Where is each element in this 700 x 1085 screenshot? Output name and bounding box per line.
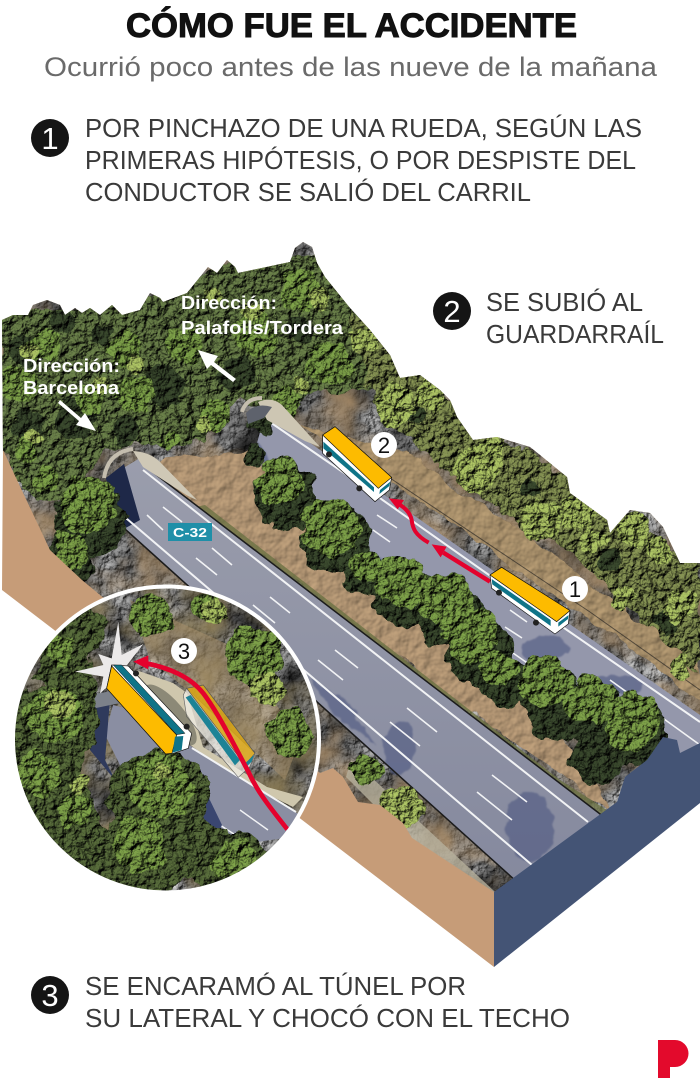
badge 3 on inset: 3 <box>178 639 190 664</box>
bus 1 <box>490 567 570 634</box>
badge 1 on map: 1 <box>569 577 581 602</box>
step 1 text: POR PINCHAZO DE UNA RUEDA, SEGÚN LAS <box>85 113 642 143</box>
step 2 badge: 2 <box>443 294 461 329</box>
second road <box>257 424 700 753</box>
arrow: towards Barcelona <box>58 400 96 431</box>
terrain photo surface <box>0 240 700 917</box>
crashed bus <box>107 665 192 754</box>
tunnel entrances <box>104 398 320 500</box>
barriers <box>115 470 700 882</box>
road markings <box>120 420 700 865</box>
step 1 badge: 1 <box>41 121 59 156</box>
badge 2 on map <box>371 432 397 458</box>
road sign C-32: C-32 <box>173 525 207 540</box>
arrow: towards Palafolls <box>198 350 236 382</box>
concrete strip below road <box>346 760 494 892</box>
step 3 text: SU LATERAL Y CHOCÓ CON EL TECHO <box>85 1003 570 1033</box>
step 1 text <box>85 113 642 207</box>
red arrow: bus 1 to 2 <box>389 498 490 582</box>
step 1 text: PRIMERAS HIPÓTESIS, O POR DESPISTE DEL <box>85 145 636 175</box>
main road <box>115 458 604 885</box>
badge 1 on map <box>562 576 588 602</box>
road sign C-32 <box>168 523 212 541</box>
step 3 text <box>85 971 570 1033</box>
step 2 text: GUARDARRAÍL <box>486 319 664 349</box>
step 3 badge: 3 <box>41 978 59 1013</box>
inset detail circle <box>10 585 322 906</box>
inset tunnel mouth <box>94 692 119 708</box>
step 1 badge <box>31 119 69 157</box>
bus 2 <box>323 427 392 502</box>
step 3 text: SE ENCARAMÓ AL TÚNEL POR <box>85 971 466 1001</box>
3D terrain map <box>0 240 700 967</box>
step 2 text <box>486 287 664 349</box>
step 1 text: CONDUCTOR SE SALIÓ DEL CARRIL <box>85 177 531 207</box>
navy front face <box>494 737 700 967</box>
median ground <box>150 450 610 810</box>
direction label: Palafolls/Tordera: Dirección: <box>181 293 277 313</box>
logo <box>658 1040 688 1078</box>
inset road <box>105 705 300 848</box>
inset red arrow <box>133 655 287 829</box>
impact star <box>75 622 143 693</box>
inset trees <box>10 591 314 906</box>
shadow behind crashed bus <box>147 684 197 746</box>
title: CÓMO FUE EL ACCIDENTE <box>126 7 577 45</box>
direction label: Barcelona: Dirección: <box>23 356 120 376</box>
step 3 badge <box>31 976 69 1014</box>
tan soil face <box>2 450 494 967</box>
inset white ring <box>13 586 319 892</box>
step 2 badge <box>433 292 471 330</box>
forest mass <box>0 250 400 500</box>
ghost bus position <box>183 685 255 777</box>
step 2 text: SE SUBIÓ AL <box>486 287 643 317</box>
inset concrete wall <box>136 670 303 807</box>
brown verge above second road <box>300 425 700 700</box>
subtitle: Ocurrió poco antes de las nueve de la mañana <box>44 52 658 82</box>
direction label: Palafolls/Tordera: Palafolls/Tordera <box>181 318 344 338</box>
direction label: Barcelona: Barcelona <box>23 378 120 398</box>
direction label: Barcelona <box>23 356 120 398</box>
badge 3 on inset <box>171 638 197 664</box>
badge 2 on map: 2 <box>378 433 390 458</box>
direction label: Palafolls/Tordera <box>181 293 344 338</box>
inset photo <box>10 585 322 906</box>
tunnel interior shadow <box>106 464 140 530</box>
trees <box>0 250 700 830</box>
road shadows <box>255 440 642 861</box>
